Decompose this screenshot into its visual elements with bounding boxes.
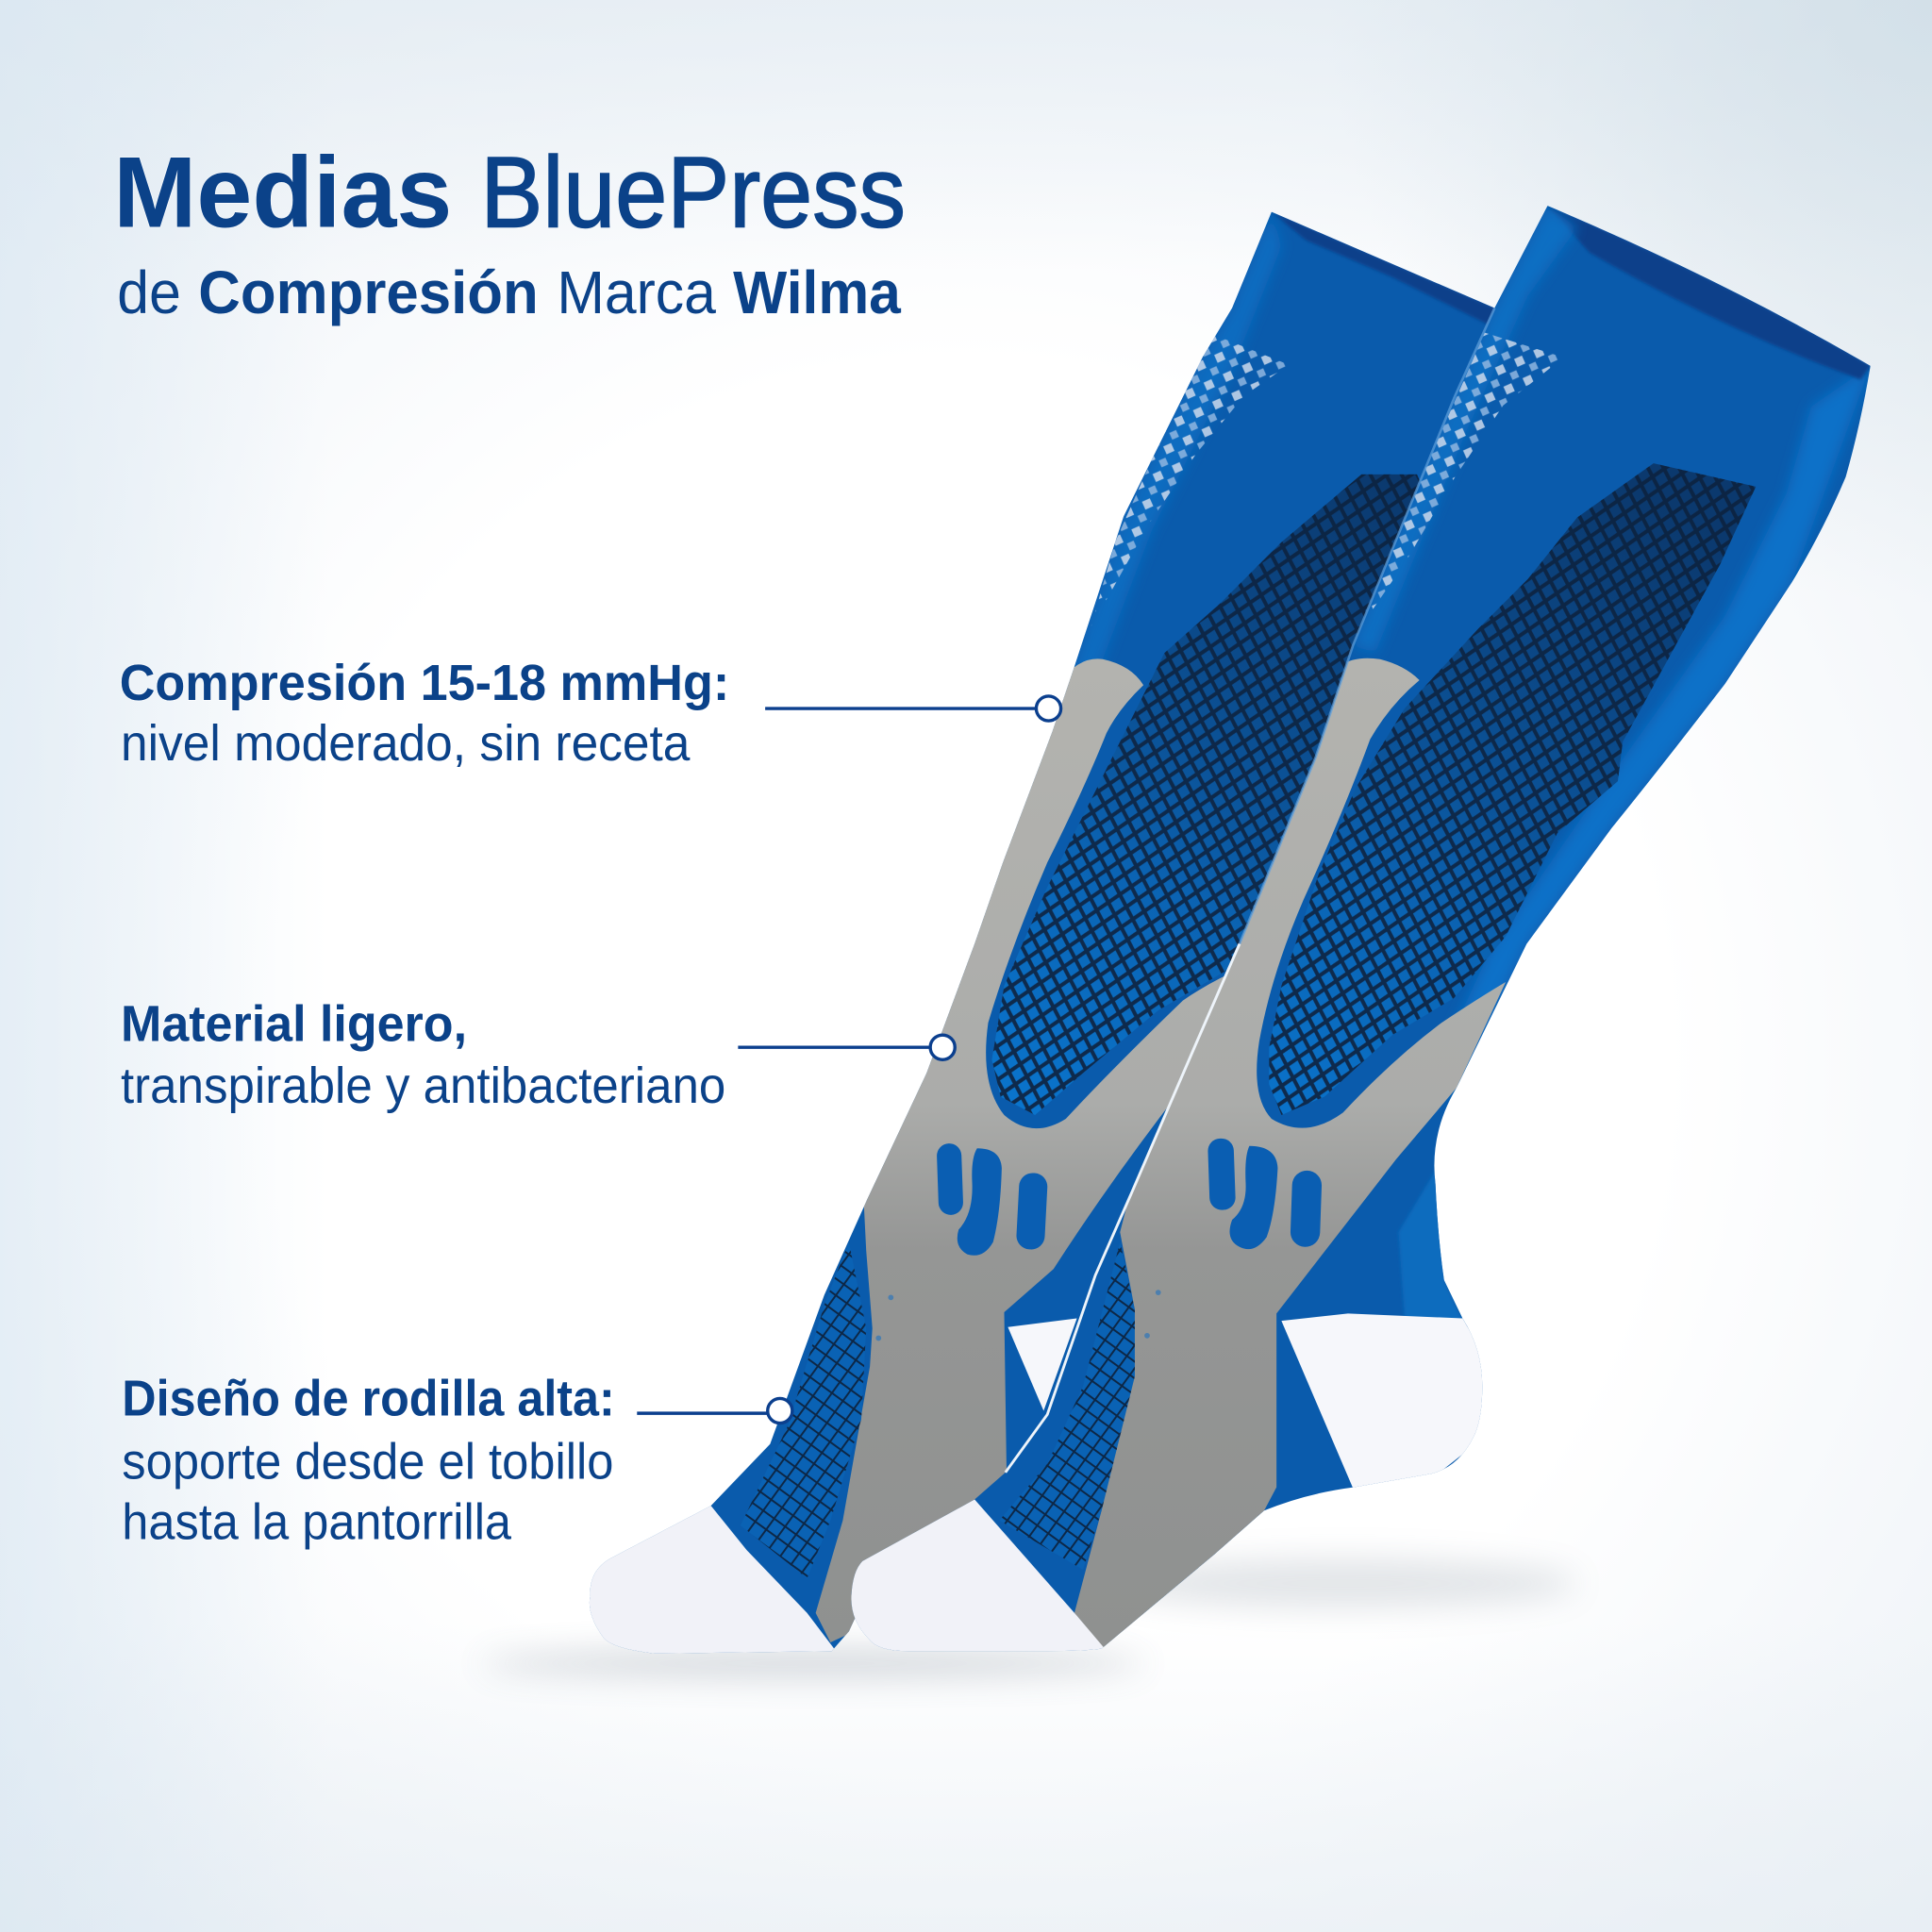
- title line 2: Marca: [557, 258, 716, 326]
- title line 1: BluePress: [480, 135, 906, 248]
- back sock grey specks: [875, 1294, 893, 1341]
- title line 1: Medias: [113, 135, 452, 248]
- title line 2: Compresión: [198, 258, 539, 326]
- front sock ankle blue marks: [1208, 1138, 1323, 1249]
- front sock grey specks: [1144, 1290, 1161, 1339]
- title line 2: Wilma: [733, 258, 901, 326]
- separation highlight between socks, upper: [1240, 308, 1494, 943]
- callout text: Diseño de rodilla alta:: [122, 1372, 615, 1427]
- callout text: Material ligero,: [121, 997, 467, 1053]
- back sock cuff highlight: [1074, 212, 1281, 675]
- back sock toe: [579, 1506, 838, 1658]
- callout text: nivel moderado, sin receta: [121, 716, 691, 772]
- front sock (right): [838, 197, 1897, 1675]
- back sock heel white: [1008, 1319, 1077, 1411]
- front sock bright right band: [1417, 366, 1871, 1109]
- callout text: [122, 1372, 615, 1550]
- back sock calf mesh: [992, 474, 1421, 1115]
- back sock lower mesh: [741, 1242, 866, 1578]
- callout: material: [121, 997, 955, 1114]
- front sock cuff left highlight: [1353, 206, 1577, 653]
- back sock ankle blue marks: [937, 1143, 1048, 1256]
- front sock grey shin panel: [1074, 658, 1506, 1649]
- front sock checker pattern: [1372, 332, 1558, 609]
- front sock lower mesh: [999, 1242, 1135, 1570]
- callout: compresión: [120, 656, 1061, 772]
- callout text: soporte desde el tobillo: [122, 1434, 613, 1490]
- front sock top rim: [1547, 206, 1871, 379]
- title line 2: de: [117, 258, 181, 326]
- callout leader: [637, 1398, 792, 1424]
- back sock checker pattern: [1091, 333, 1289, 628]
- callout text: transpirable y antibacteriano: [121, 1058, 725, 1114]
- front sock heel light band: [1398, 1171, 1462, 1321]
- callout text: hasta la pantorrilla: [122, 1494, 511, 1550]
- back sock grey shin panel: [816, 658, 1257, 1642]
- separation highlight between socks, lower: [1006, 943, 1240, 1473]
- front sock calf mesh: [1269, 463, 1756, 1115]
- back sock blue body: [589, 211, 1494, 1654]
- title line 2: [117, 258, 901, 326]
- back sock (left): [589, 211, 1494, 1654]
- callout text: [120, 656, 729, 772]
- callout leader: [738, 1035, 955, 1059]
- front sock blue body: [838, 197, 1897, 1675]
- back sock top rim: [1272, 212, 1494, 327]
- title line 1: [113, 135, 906, 248]
- callout leader: [765, 696, 1061, 721]
- callout: diseño: [122, 1372, 792, 1550]
- callout text: Compresión 15-18 mmHg:: [120, 656, 729, 711]
- front sock heel white: [1281, 1313, 1491, 1491]
- floor shadows: [480, 1558, 1577, 1677]
- callout text: [121, 997, 725, 1114]
- front sock toe: [838, 1500, 1109, 1658]
- title: [113, 135, 906, 326]
